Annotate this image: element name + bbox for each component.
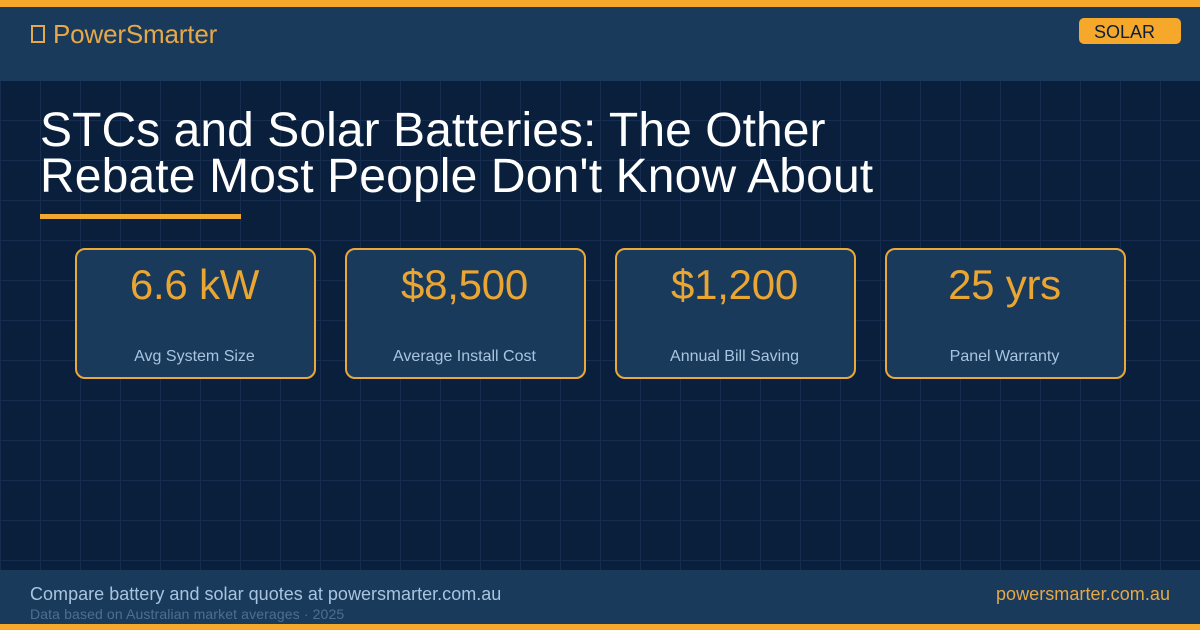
category badge: [1079, 18, 1181, 44]
label: Panel Warranty: [950, 348, 1059, 365]
title: [40, 104, 873, 203]
value: 6.6 kW: [130, 261, 259, 308]
header band: [0, 7, 1200, 81]
label: Annual Bill Saving: [670, 348, 799, 365]
value: $8,500: [401, 261, 528, 308]
call to action: Compare battery and solar quotes at powersmarter.com.au: [30, 584, 501, 604]
footer band: [0, 570, 1200, 624]
badge label: SOLAR: [1094, 22, 1155, 42]
stat card: bill saving: [615, 248, 856, 379]
label: Average Install Cost: [393, 348, 536, 365]
icon: missing glyph box: [31, 25, 45, 43]
footer url: powersmarter.com.au: [996, 584, 1170, 604]
title: STCs and Solar Batteries: The Other: [40, 104, 826, 157]
stat card: system size: [75, 248, 316, 379]
title underline: [40, 214, 241, 219]
bottom accent bar: [0, 624, 1200, 630]
brand name: PowerSmarter: [53, 19, 217, 49]
stat card: install cost: [345, 248, 586, 379]
data source note: Data based on Australian market averages · 2025: [30, 606, 344, 622]
label: Avg System Size: [134, 348, 255, 365]
value: $1,200: [671, 261, 798, 308]
top accent bar: [0, 0, 1200, 7]
stat card: warranty: [885, 248, 1126, 379]
value: 25 yrs: [948, 261, 1061, 308]
title: Rebate Most People Don't Know About: [40, 150, 873, 203]
